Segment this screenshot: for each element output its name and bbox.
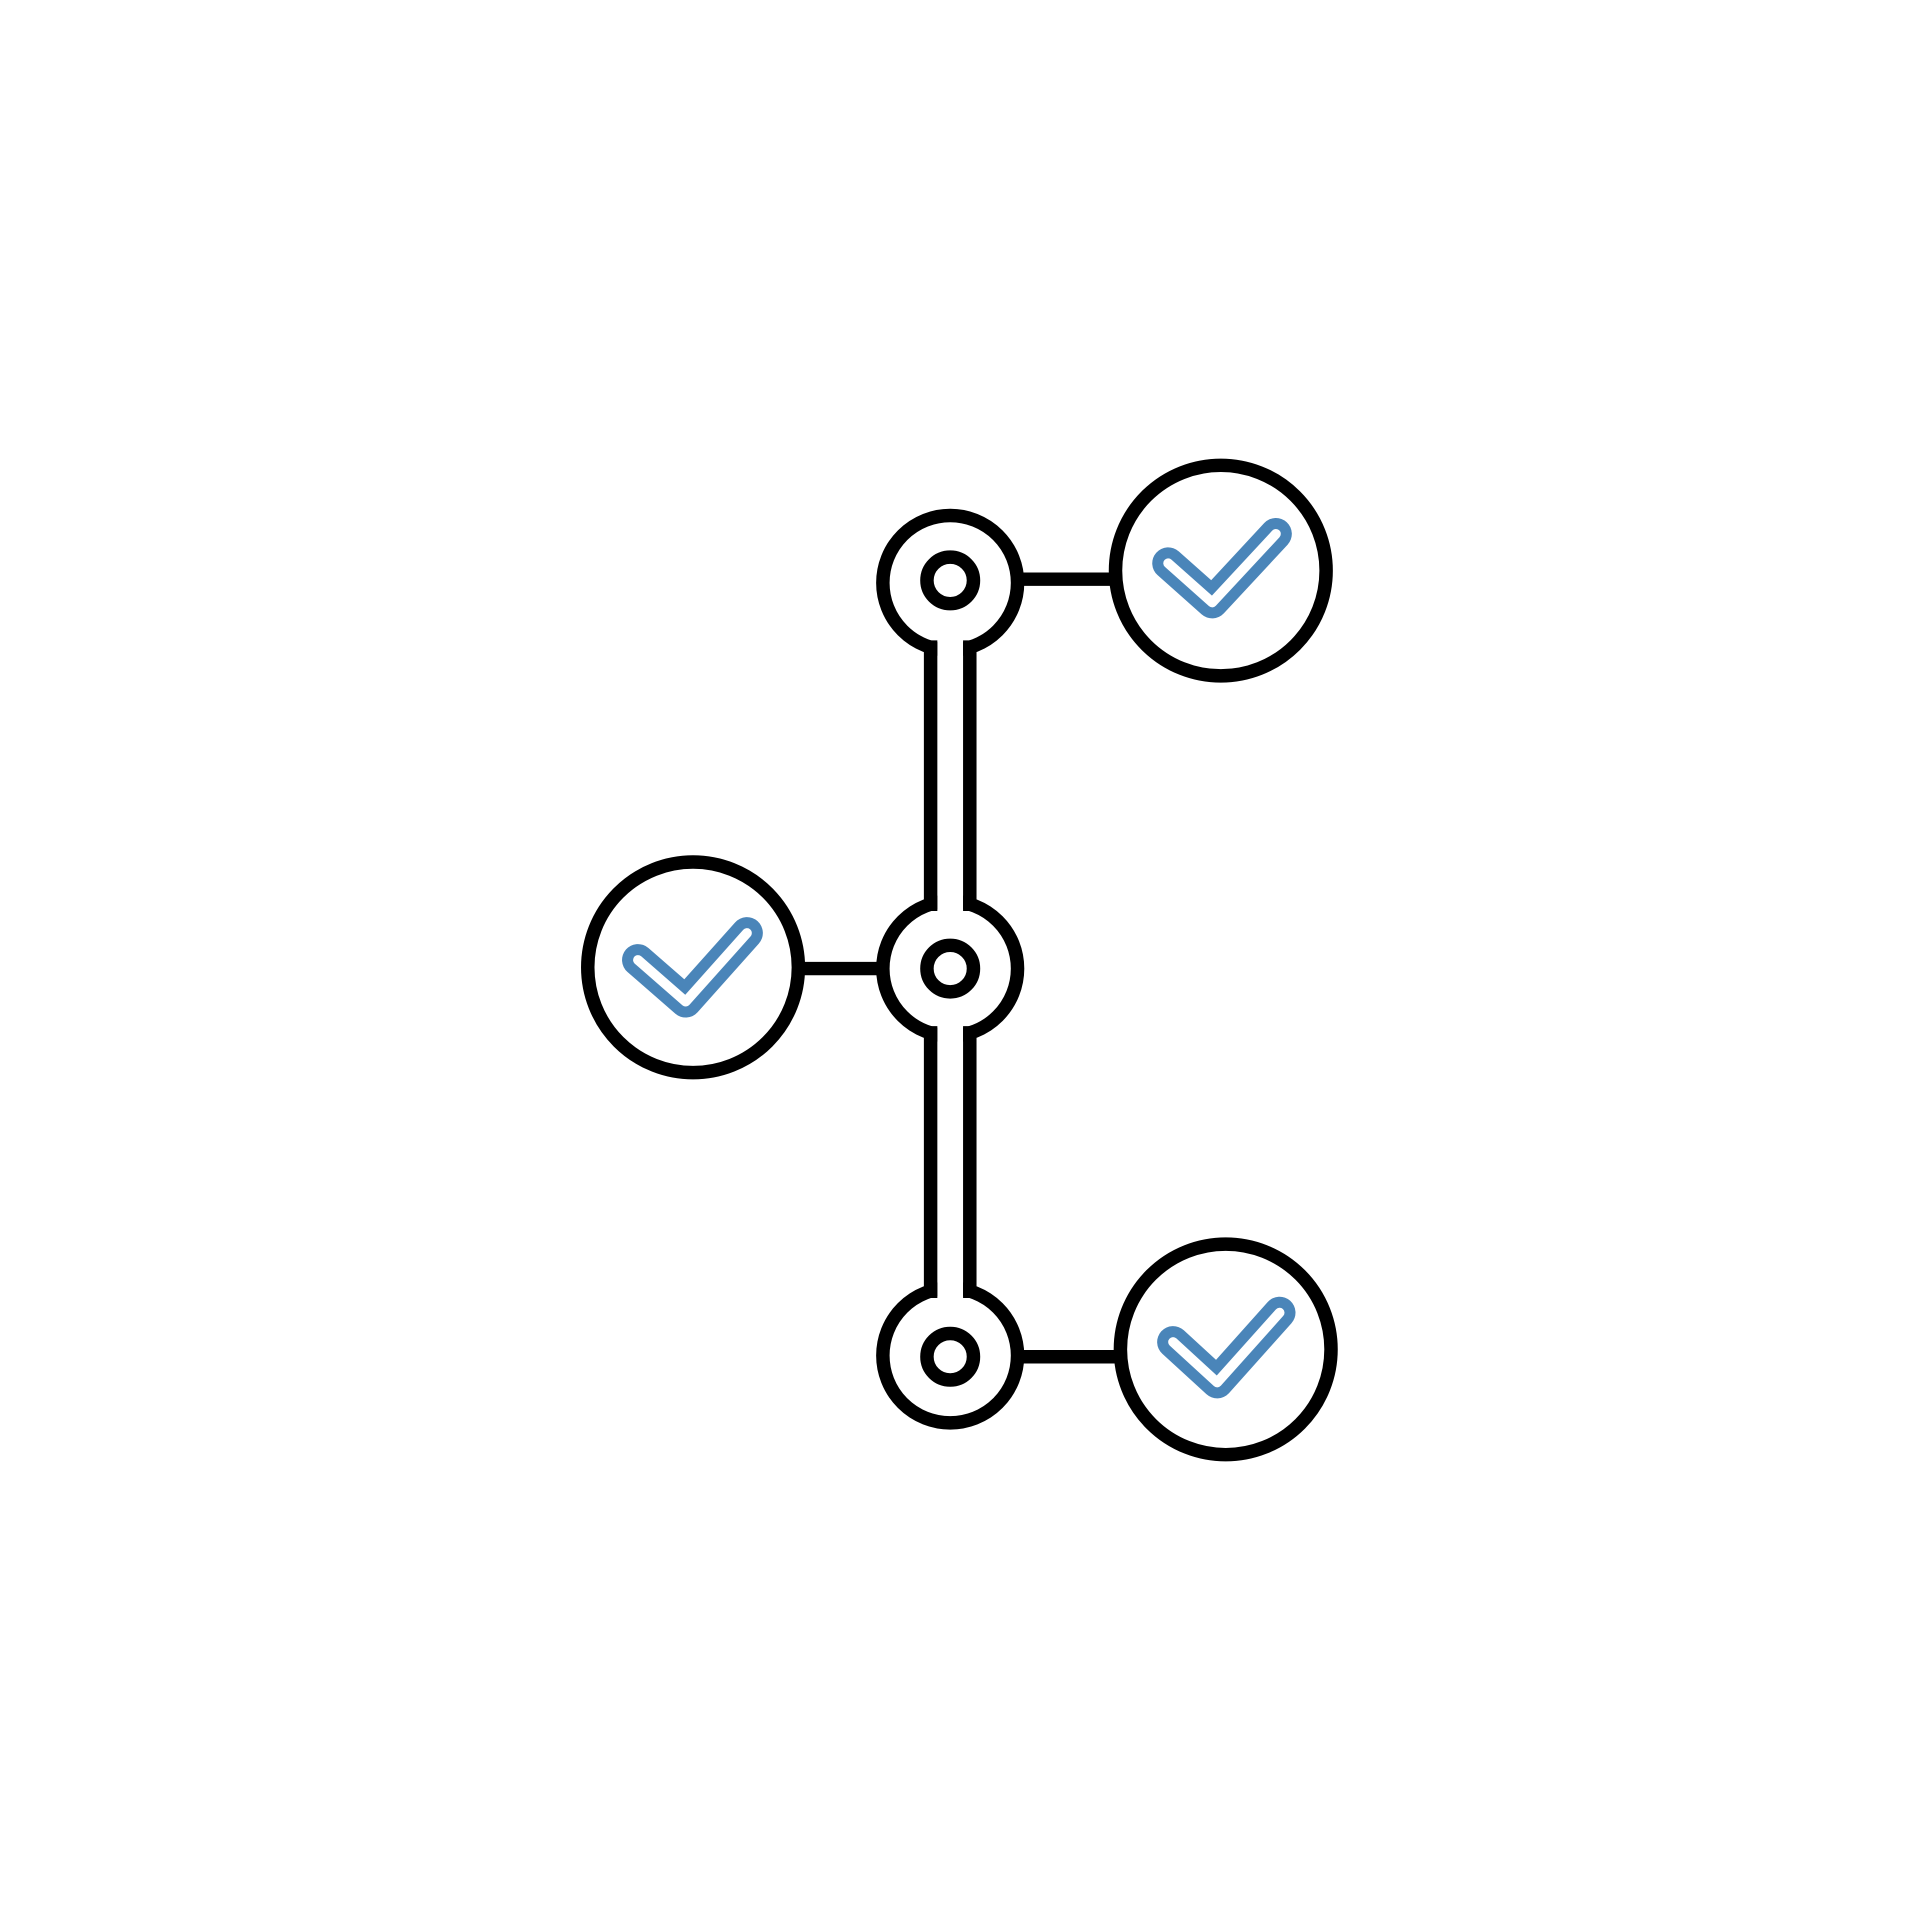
icon: checkmark left <box>638 933 747 1002</box>
connector lines <box>798 579 1122 1357</box>
big circle: left <box>588 862 798 1073</box>
icon: checkmark top <box>1168 534 1276 602</box>
icon: checkmark bottom <box>1173 1313 1280 1382</box>
big circle: bottom right <box>1120 1244 1331 1455</box>
big circle: top right <box>1116 465 1326 676</box>
timeline spine with nodes <box>883 516 1018 1423</box>
